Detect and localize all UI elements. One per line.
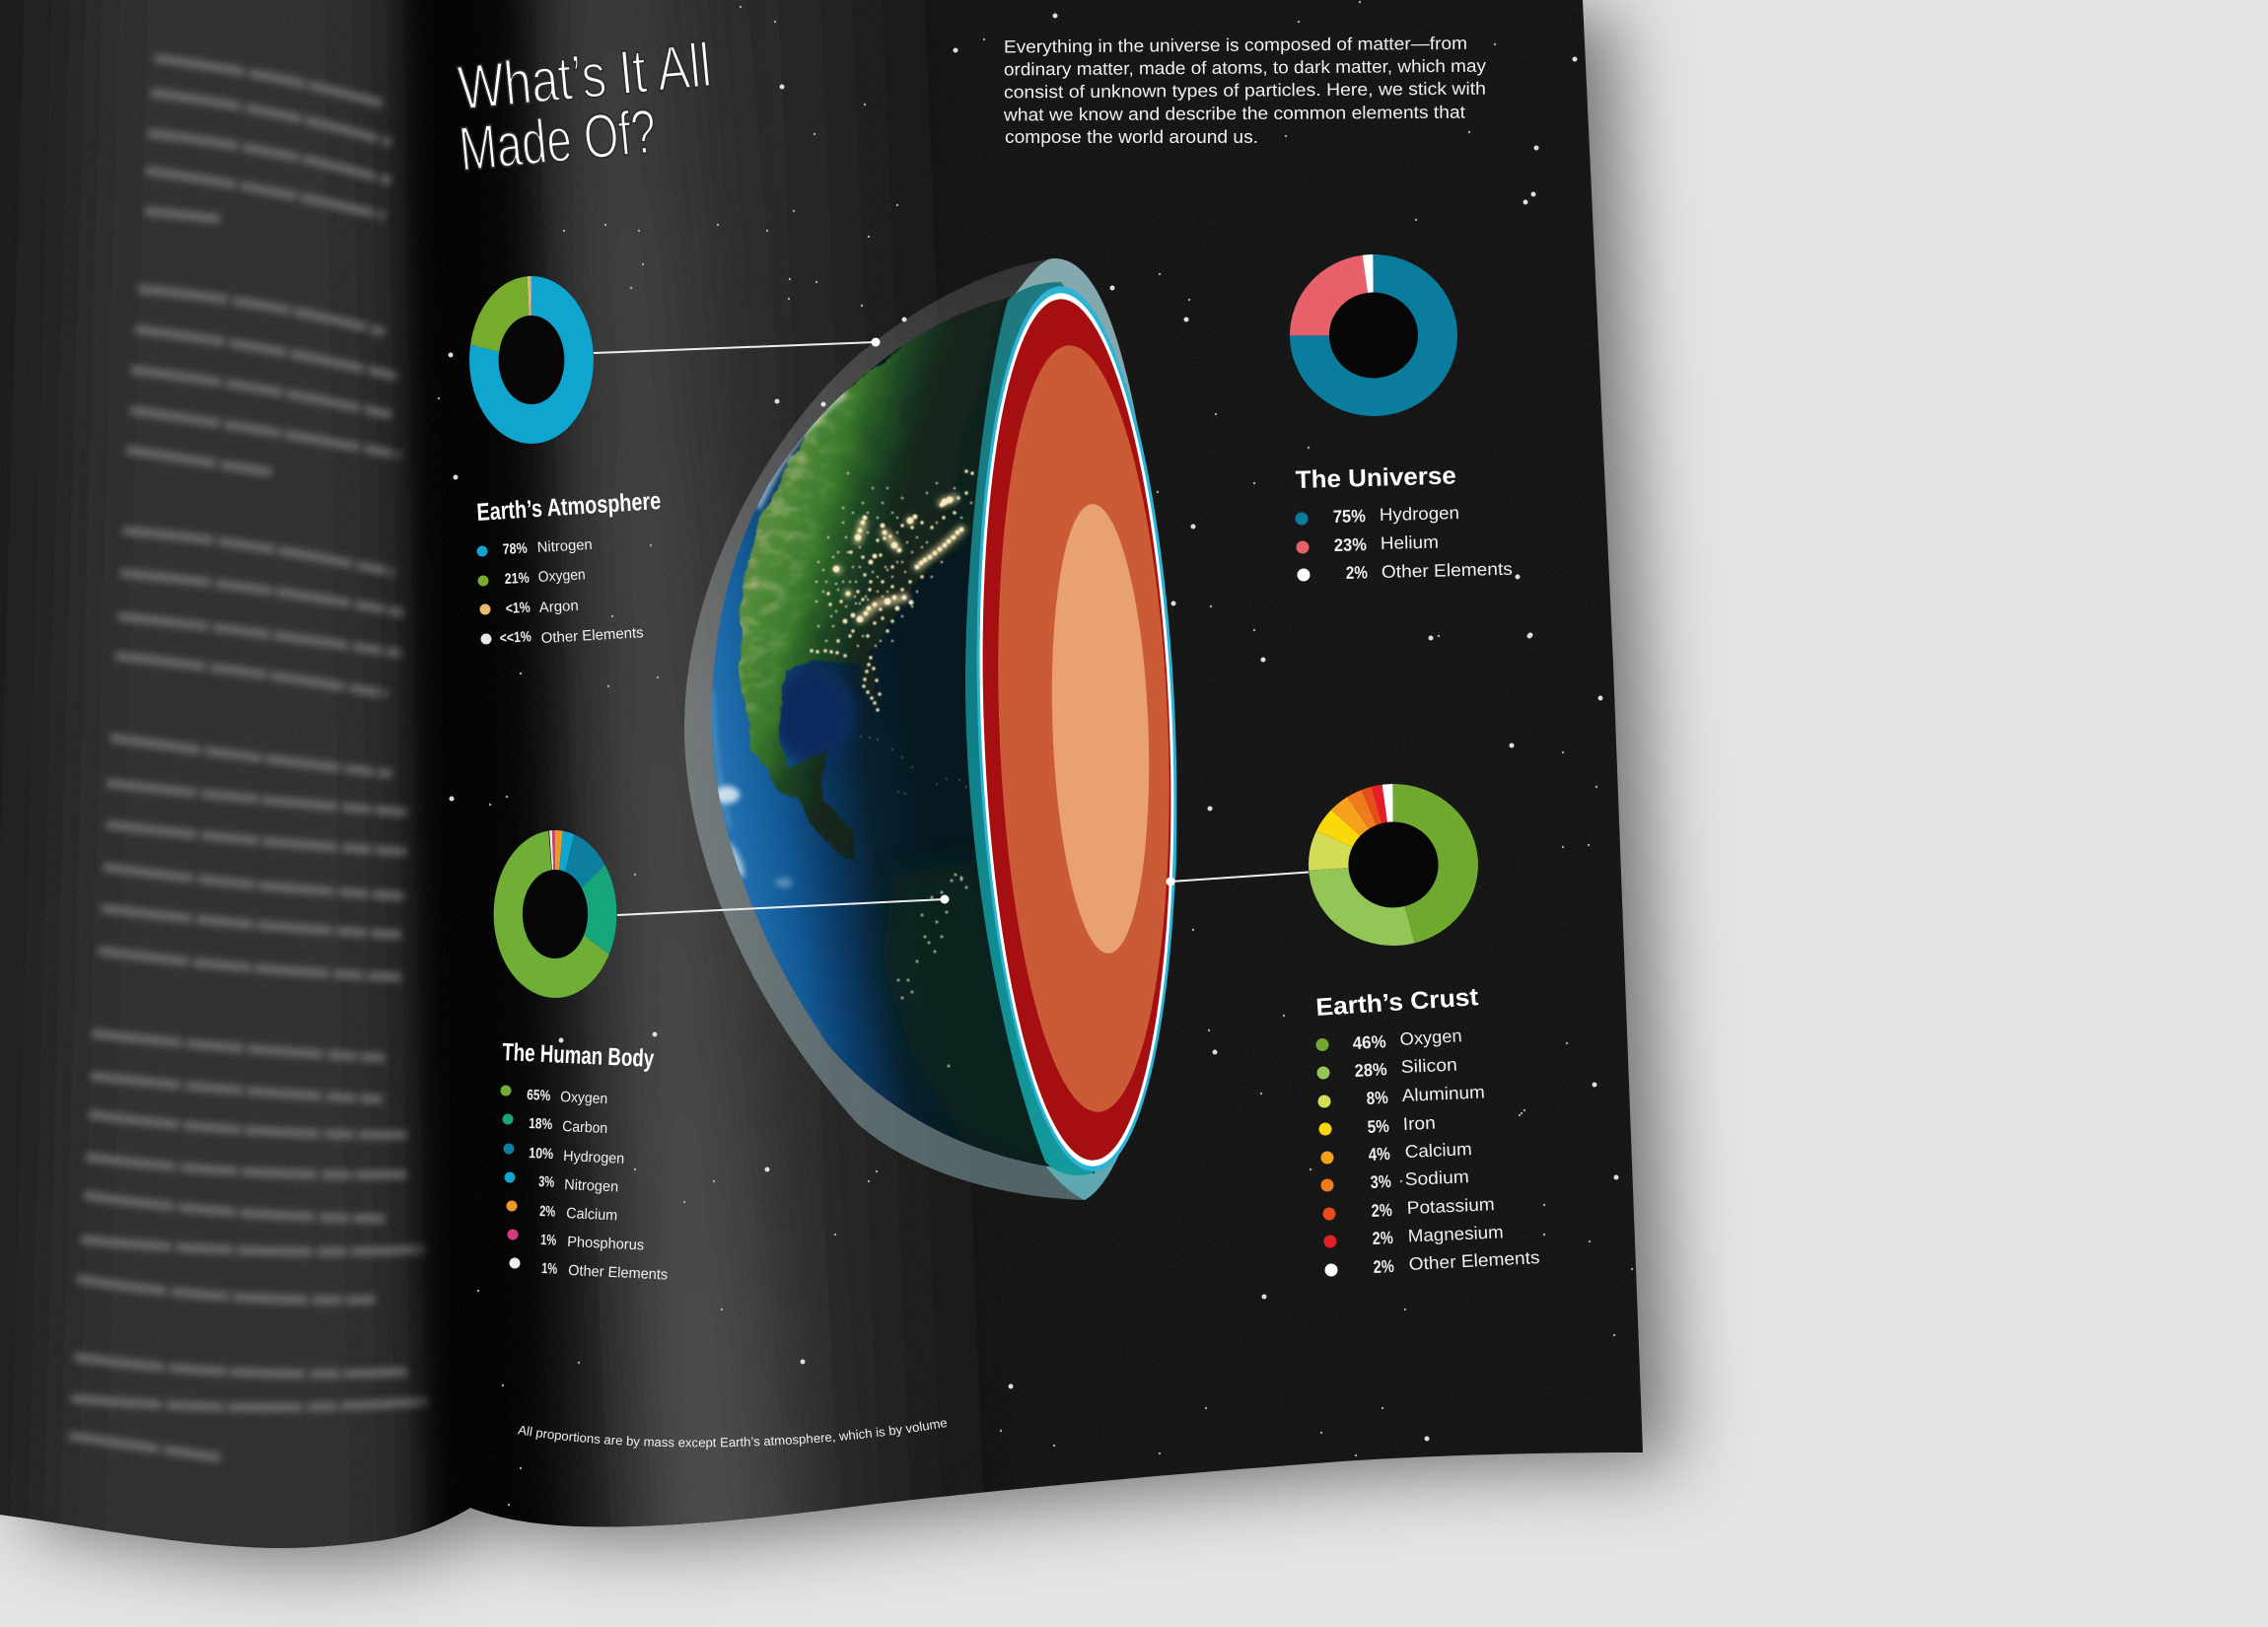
legend: 28% <box>1354 1059 1387 1081</box>
title <box>456 31 714 184</box>
inner core <box>1044 502 1157 955</box>
legend: Nitrogen <box>536 536 593 556</box>
open magazine spread <box>0 0 1643 1548</box>
legend: 2% <box>1372 1228 1393 1248</box>
paper grain <box>0 0 1676 1578</box>
intro paragraph: compose the world around us. <box>1005 127 1258 147</box>
donut chart: human body <box>494 830 616 998</box>
legend: Calcium <box>1404 1139 1472 1162</box>
legend: 23% <box>1334 534 1367 555</box>
leader line <box>1166 872 1309 885</box>
globe surface <box>712 297 1095 1173</box>
legend: <1% <box>505 600 531 617</box>
city lights <box>812 471 972 1066</box>
legend <box>1296 503 1513 583</box>
legend: Other Elements <box>1382 559 1513 582</box>
legend <box>477 536 644 647</box>
legend: 18% <box>529 1115 553 1133</box>
donut chart: crust <box>1309 784 1478 946</box>
crust band <box>965 282 1176 1175</box>
legend: Carbon <box>562 1118 608 1137</box>
heading: Earth’s Crust <box>1315 983 1480 1022</box>
heading: Earth’s Atmosphere <box>476 487 662 527</box>
panel: The Universe <box>1290 254 1513 583</box>
white ring <box>964 290 1189 1169</box>
mantle and crust rings <box>961 282 1192 1175</box>
legend: Other Elements <box>1408 1247 1540 1274</box>
legend: 3% <box>538 1173 555 1191</box>
legend: Hydrogen <box>563 1148 625 1167</box>
legend: 4% <box>1368 1144 1390 1165</box>
dark red layer <box>967 296 1186 1164</box>
orange layer <box>985 342 1182 1115</box>
legend: 2% <box>1346 562 1368 583</box>
leader line <box>594 337 880 353</box>
legend: Oxygen <box>537 566 586 586</box>
legend: 2% <box>539 1203 556 1221</box>
legend: 3% <box>1370 1171 1391 1192</box>
legend: 75% <box>1333 506 1366 527</box>
legend: 10% <box>529 1145 554 1163</box>
panel: Earth's Atmosphere <box>469 276 880 647</box>
city light glow <box>838 498 961 619</box>
legend: Phosphorus <box>567 1234 645 1254</box>
legend: Oxygen <box>560 1089 608 1107</box>
intro paragraph: consist of unknown types of particles. Here, we stick with <box>1004 79 1486 102</box>
leader line <box>617 895 949 915</box>
intro paragraph: Everything in the universe is composed of matter—from <box>1004 34 1467 56</box>
heading: The Universe <box>1295 461 1456 494</box>
legend <box>501 1085 668 1284</box>
legend: Other Elements <box>540 624 644 647</box>
earth cutaway <box>684 258 1192 1200</box>
intro paragraph <box>1003 34 1486 147</box>
footnote: All proportions are by mass except Earth’s atmosphere, which is by volume <box>517 1420 947 1450</box>
legend: 21% <box>504 570 530 588</box>
legend: 65% <box>527 1087 551 1104</box>
legend: Silicon <box>1400 1055 1457 1077</box>
legend: Helium <box>1381 532 1439 553</box>
legend: 1% <box>541 1260 558 1278</box>
legend: Oxygen <box>1399 1026 1462 1049</box>
donut chart: atmosphere <box>469 276 594 444</box>
legend: 8% <box>1366 1088 1388 1108</box>
donut chart: universe <box>1290 254 1457 416</box>
legend: 5% <box>1367 1116 1389 1137</box>
legend: 2% <box>1373 1256 1394 1277</box>
legend: Hydrogen <box>1380 503 1459 525</box>
legend: Magnesium <box>1407 1222 1504 1245</box>
legend: 46% <box>1352 1031 1386 1053</box>
legend: 1% <box>540 1232 557 1249</box>
legend: 78% <box>502 540 528 558</box>
intro paragraph: what we know and describe the common elements that <box>1003 103 1465 125</box>
panel: Earth's Crust <box>1166 784 1540 1277</box>
legend <box>1315 1026 1540 1277</box>
heading: The Human Body <box>502 1038 655 1073</box>
atmosphere cut face <box>1014 258 1176 1200</box>
legend: Potassium <box>1406 1194 1495 1218</box>
legend: <<1% <box>499 628 532 647</box>
legend: Other Elements <box>568 1262 668 1284</box>
atmosphere dome <box>684 258 1085 1200</box>
legend: Sodium <box>1404 1167 1469 1189</box>
legend: Argon <box>538 598 579 616</box>
legend: Calcium <box>566 1205 618 1224</box>
intro paragraph: ordinary matter, made of atoms, to dark matter, which may <box>1004 56 1486 79</box>
star field <box>439 2 1632 1505</box>
legend: Iron <box>1402 1113 1436 1134</box>
legend: 2% <box>1371 1200 1392 1221</box>
panel: The Human Body <box>494 830 949 1284</box>
title: Made Of? <box>457 97 659 184</box>
legend: Nitrogen <box>564 1176 619 1195</box>
legend: Aluminum <box>1401 1082 1485 1105</box>
title: What’s It All <box>456 31 714 123</box>
blurred left page text <box>69 58 431 1458</box>
blue ring <box>961 282 1192 1175</box>
magazine drop shadow <box>30 12 1672 1560</box>
